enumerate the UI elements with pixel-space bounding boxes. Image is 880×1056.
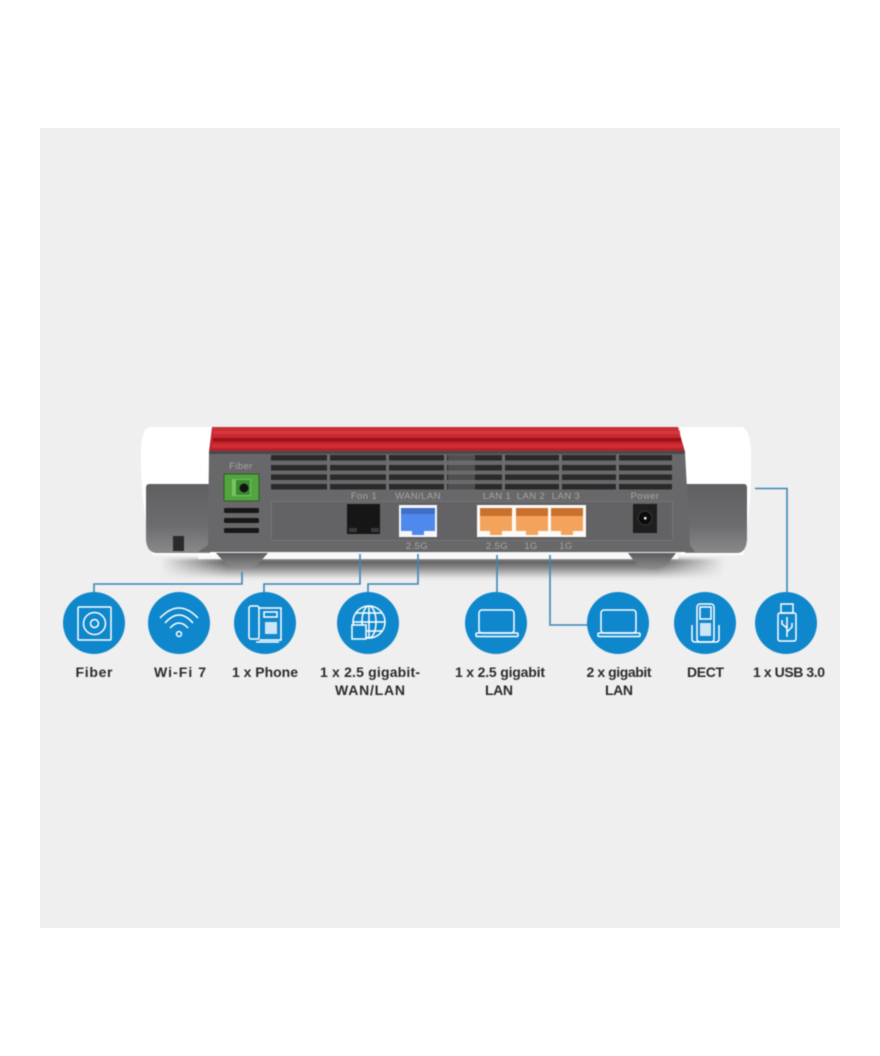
icon: laptop LAN 1	[465, 592, 527, 654]
LAN ports	[477, 491, 586, 552]
line: USB	[755, 488, 787, 592]
line: WAN	[368, 554, 418, 592]
left foot	[216, 553, 268, 568]
label: 1 x 2.5 gigabit LAN: 1 x 2.5 gigabit	[455, 664, 545, 680]
label: 1 x 2.5 gigabit WAN/LAN: 1 x 2.5 gigabit-	[320, 664, 420, 680]
left white end cap	[141, 427, 216, 555]
WAN/LAN port	[395, 491, 441, 552]
LAN ports: 1G	[524, 541, 538, 552]
LAN ports: LAN 1	[483, 491, 511, 502]
label: 1 x Phone: 1 x Phone	[232, 664, 298, 680]
icon: Wi-Fi	[148, 592, 210, 654]
right foot	[628, 553, 676, 570]
WAN/LAN port: 2.5G	[406, 541, 428, 552]
background panel	[40, 128, 840, 928]
left grey side block	[146, 484, 210, 553]
main grey body	[198, 452, 695, 552]
small latch	[173, 536, 184, 551]
icon: fiber	[63, 592, 125, 654]
phone port	[347, 491, 380, 534]
icon: USB stick	[755, 592, 817, 654]
line: LAN 2 and 3	[550, 555, 588, 625]
line: LAN 1	[496, 555, 498, 592]
label: 1 x 2.5 gigabit WAN/LAN	[320, 664, 420, 698]
label: 2 x gigabit LAN: LAN	[605, 682, 633, 698]
power port: Power	[631, 491, 659, 502]
infographic content	[63, 427, 825, 698]
label: Wi-Fi 7: Wi-Fi 7	[154, 664, 206, 680]
label: 1 x USB 3.0: 1 x USB 3.0	[753, 664, 825, 680]
right grey side block	[685, 484, 747, 553]
LAN ports: 2.5G	[486, 541, 508, 552]
fiber port	[224, 461, 259, 501]
port panel recess	[272, 502, 672, 540]
white highlight under body	[198, 553, 678, 559]
icon: laptop LAN 2	[587, 592, 649, 654]
LAN ports: LAN 3	[552, 491, 580, 502]
connector lines	[94, 488, 787, 625]
line: phone	[264, 554, 360, 592]
icon: globe with port	[337, 592, 399, 654]
line: fiber	[94, 572, 242, 592]
fiber port: Fiber	[229, 461, 253, 472]
label: 1 x 2.5 gigabit WAN/LAN: WAN/LAN	[335, 682, 405, 698]
phone port: Fon 1	[351, 491, 377, 502]
router	[141, 427, 751, 579]
ventilation grille	[271, 454, 672, 490]
LAN ports: LAN 2	[517, 491, 545, 502]
icon: DECT handset	[674, 592, 736, 654]
power port	[631, 491, 659, 533]
label: DECT: DECT	[687, 664, 724, 680]
side slots	[224, 508, 259, 533]
right white end cap	[680, 427, 751, 555]
LAN ports: 1G	[559, 541, 573, 552]
router shadow	[160, 559, 725, 579]
red top cover	[209, 427, 685, 454]
icon: phone	[234, 592, 296, 654]
label: 2 x gigabit LAN: 2 x gigabit	[586, 664, 652, 680]
label: 1 x 2.5 gigabit LAN: LAN	[485, 682, 513, 698]
label: 1 x 2.5 gigabit LAN	[455, 664, 545, 698]
WAN/LAN port: WAN/LAN	[395, 491, 441, 502]
label: Fiber: Fiber	[76, 664, 113, 680]
label: 2 x gigabit LAN	[586, 664, 652, 698]
